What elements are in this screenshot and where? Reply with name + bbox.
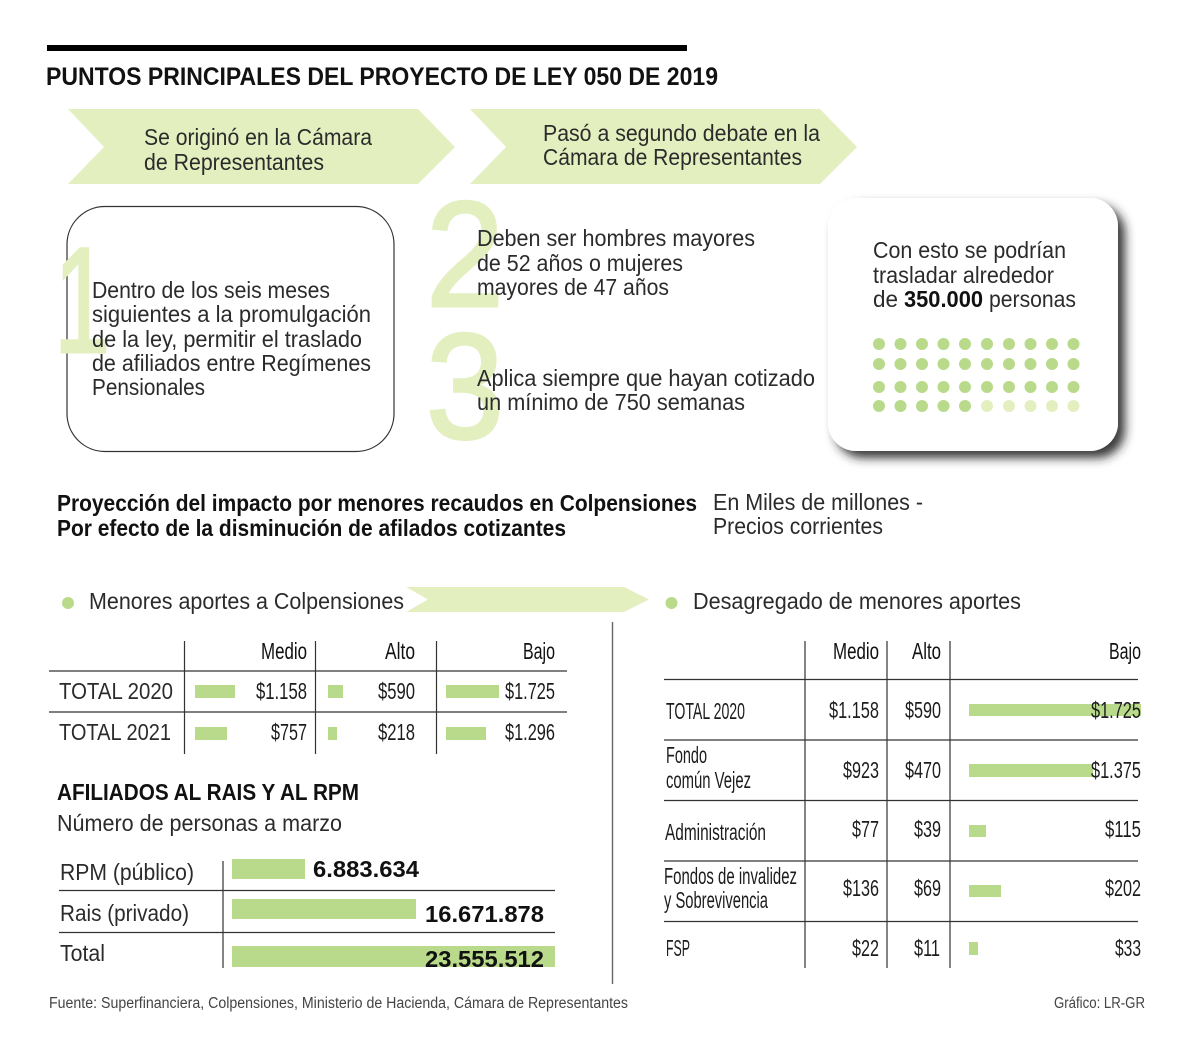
row: total 2020: $1.158 xyxy=(256,678,307,704)
bar chart: afiliados xyxy=(59,856,555,972)
row: total 2021: $1.296 xyxy=(505,719,555,745)
arrow: origin in the Cámara: Se originó en la Cámara xyxy=(144,124,372,150)
row: total 2020: $1.725 xyxy=(505,678,555,704)
arrow: second debate: Cámara de Representantes xyxy=(543,144,802,170)
row: total 2020: $1.725 xyxy=(1091,697,1141,723)
row: fondos de invalidez xyxy=(664,863,1141,913)
bar: Total: 23.555.512 xyxy=(425,946,544,972)
row: total 2021: TOTAL 2021 xyxy=(59,719,171,745)
units note: En Miles de millones - xyxy=(713,489,923,515)
point 2: Deben ser hombres mayores xyxy=(477,225,755,251)
units note xyxy=(713,489,923,539)
row: administración xyxy=(665,816,1141,845)
panel: 350.000 people card: trasladar alrededor xyxy=(873,262,1054,288)
units note: Precios corrientes xyxy=(713,513,883,539)
table: desagregado: Alto xyxy=(912,638,941,664)
table: menores aportes xyxy=(49,638,567,754)
row: fondos de invalidez: $69 xyxy=(914,875,941,901)
arrow: second debate xyxy=(470,109,857,184)
row: total 2020 xyxy=(59,678,555,704)
section heading: menores aportes: Menores aportes a Colpensiones xyxy=(89,588,404,614)
point 3: un mínimo de 750 semanas xyxy=(477,389,745,415)
row: total 2020: TOTAL 2020 xyxy=(59,678,173,704)
point 3: 3 xyxy=(426,302,504,470)
row: FSP: $33 xyxy=(1115,935,1141,961)
panel: 350.000 people card: de xyxy=(873,286,898,312)
row: fondo común vejez: $923 xyxy=(843,757,879,783)
table: menores aportes: Medio xyxy=(261,638,307,664)
panel: 350.000 people card xyxy=(828,198,1118,451)
panel: point 1: Dentro de los seis meses xyxy=(92,277,330,303)
bar: Rais xyxy=(60,899,544,927)
panel: point 1: 1 xyxy=(54,216,110,384)
row: FSP xyxy=(666,935,1141,961)
row: total 2020: TOTAL 2020 xyxy=(666,698,745,724)
bar: RPM: 6.883.634 xyxy=(313,856,419,882)
source note: Fuente: Superfinanciera, Colpensiones, Ministerio de Hacienda, Cámara de Representantes xyxy=(49,995,628,1012)
row: total 2020 xyxy=(666,697,1141,724)
panel: point 1: de afiliados entre Regímenes xyxy=(92,350,371,376)
panel: 350.000 people card: 350.000 xyxy=(904,286,983,312)
bar: Rais: Rais (privado) xyxy=(60,900,189,926)
table: menores aportes: Bajo xyxy=(523,638,555,664)
heading: afiliados: Número de personas a marzo xyxy=(57,810,342,836)
table: menores aportes: Alto xyxy=(385,638,415,664)
arrow: to breakdown xyxy=(406,587,649,612)
row: administración: $39 xyxy=(914,816,941,842)
bar: Total xyxy=(60,940,555,972)
panel: point 1: Pensionales xyxy=(92,374,205,400)
heading: afiliados: AFILIADOS AL RAIS Y AL RPM xyxy=(57,779,359,805)
row: fondo común vejez: $470 xyxy=(905,757,941,783)
row: fondo común vejez xyxy=(666,742,1141,793)
row: FSP: $22 xyxy=(852,935,879,961)
row: fondos de invalidez: $136 xyxy=(843,875,879,901)
row: fondo común vejez: $1.375 xyxy=(1091,757,1141,783)
row: fondos de invalidez: $202 xyxy=(1105,875,1141,901)
row: fondo común vejez: común Vejez xyxy=(666,767,751,793)
point 2: de 52 años o mujeres xyxy=(477,250,683,276)
heading: projection: Proyección del impacto por menores recaudos en Colpensiones xyxy=(57,490,697,516)
title xyxy=(46,45,718,91)
point 3: Aplica siempre que hayan cotizado xyxy=(477,365,815,391)
credit: Gráfico: LR-GR xyxy=(1054,995,1145,1012)
table: desagregado: Medio xyxy=(833,638,879,664)
panel: point 1: de la ley, permitir el traslado xyxy=(92,326,362,352)
row: administración: $115 xyxy=(1105,816,1141,842)
heading: afiliados xyxy=(57,779,359,836)
arrow: second debate: Pasó a segundo debate en la xyxy=(543,120,820,146)
bar: RPM xyxy=(60,856,419,885)
row: fondos de invalidez: y Sobrevivencia xyxy=(664,887,768,913)
section heading: desagregado: Desagregado de menores aportes xyxy=(693,588,1021,614)
title: PUNTOS PRINCIPALES DEL PROYECTO DE LEY 050 DE 2019 xyxy=(46,63,718,91)
dot matrix xyxy=(873,338,1080,412)
row: FSP: FSP xyxy=(666,935,690,961)
heading: projection xyxy=(57,490,697,541)
row: total 2020: $590 xyxy=(378,678,415,704)
row: administración: Administración xyxy=(665,819,766,845)
bar: RPM: RPM (público) xyxy=(60,859,194,885)
row: fondo común vejez: Fondo xyxy=(666,742,707,768)
point 3 xyxy=(426,302,815,470)
row: total 2020: $590 xyxy=(905,697,941,723)
panel: point 1 xyxy=(54,206,394,452)
table: desagregado xyxy=(664,638,1141,968)
point 2: 2 xyxy=(426,170,504,338)
arrow: origin in the Cámara: de Representantes xyxy=(144,149,324,175)
bar: Rais: 16.671.878 xyxy=(425,901,544,927)
row: fondos de invalidez: Fondos de invalidez xyxy=(664,863,797,889)
row: administración: $77 xyxy=(852,816,879,842)
row: total 2020: $1.158 xyxy=(829,697,879,723)
point 2 xyxy=(426,170,755,338)
panel: 350.000 people card: Con esto se podrían xyxy=(873,237,1066,263)
heading: projection: Por efecto de la disminución de afilados cotizantes xyxy=(57,515,566,541)
arrow: origin in the Cámara xyxy=(68,109,455,184)
row: total 2021 xyxy=(59,719,555,745)
bar: Total: Total xyxy=(60,940,105,966)
table: desagregado: Bajo xyxy=(1109,638,1141,664)
row: total 2021: $757 xyxy=(271,719,307,745)
row: FSP: $11 xyxy=(914,935,940,961)
panel: point 1: siguientes a la promulgación xyxy=(92,301,371,327)
point 2: mayores de 47 años xyxy=(477,274,669,300)
panel: 350.000 people card: personas xyxy=(989,286,1076,312)
row: total 2021: $218 xyxy=(378,719,415,745)
